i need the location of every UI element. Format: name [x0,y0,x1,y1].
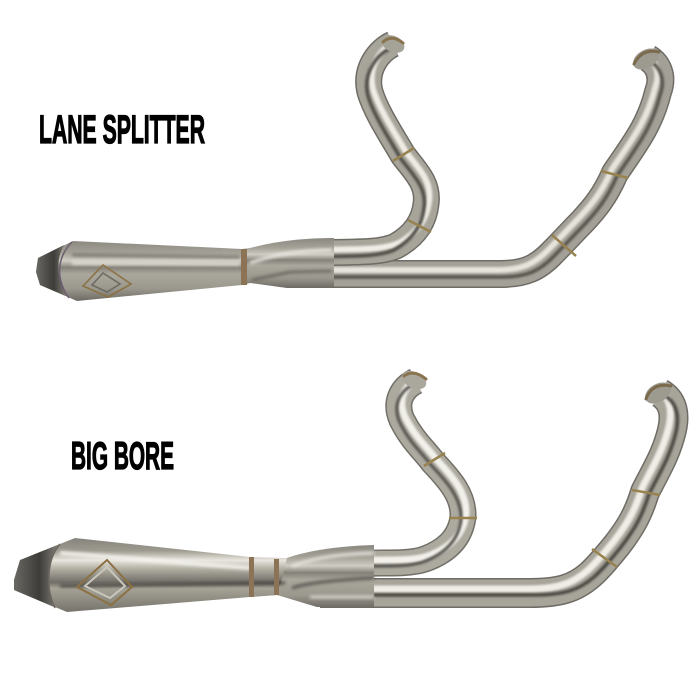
header pipe end caps [379,32,663,74]
muffler tip [36,245,68,297]
weld seams [424,453,660,567]
short header pipe [298,41,429,257]
header flanges [383,38,659,64]
long header pipe [297,54,662,277]
header pipe end caps [399,367,675,408]
exhaust: Lane Splitter [36,32,663,301]
collector weld ring [241,249,247,285]
tip weld ring [60,242,72,298]
collector [242,238,334,288]
long header pipe [317,389,678,595]
collector [277,545,374,608]
label: Lane Splitter: LANE SPLITTER [39,108,205,152]
muffler streaks [60,553,374,597]
muffler body [36,241,242,301]
label: Big Bore: BIG BORE [71,435,174,478]
diamond logo [77,560,132,605]
tip weld ring [49,544,60,608]
short header pipe [338,378,466,566]
exhaust: Big Bore [14,367,678,612]
collector weld rings [249,557,279,597]
muffler tip [14,544,60,607]
header flanges [404,373,671,399]
muffler body [14,538,287,612]
diamond logo [83,265,131,297]
weld seams [393,148,628,256]
muffler streaks [72,250,332,280]
